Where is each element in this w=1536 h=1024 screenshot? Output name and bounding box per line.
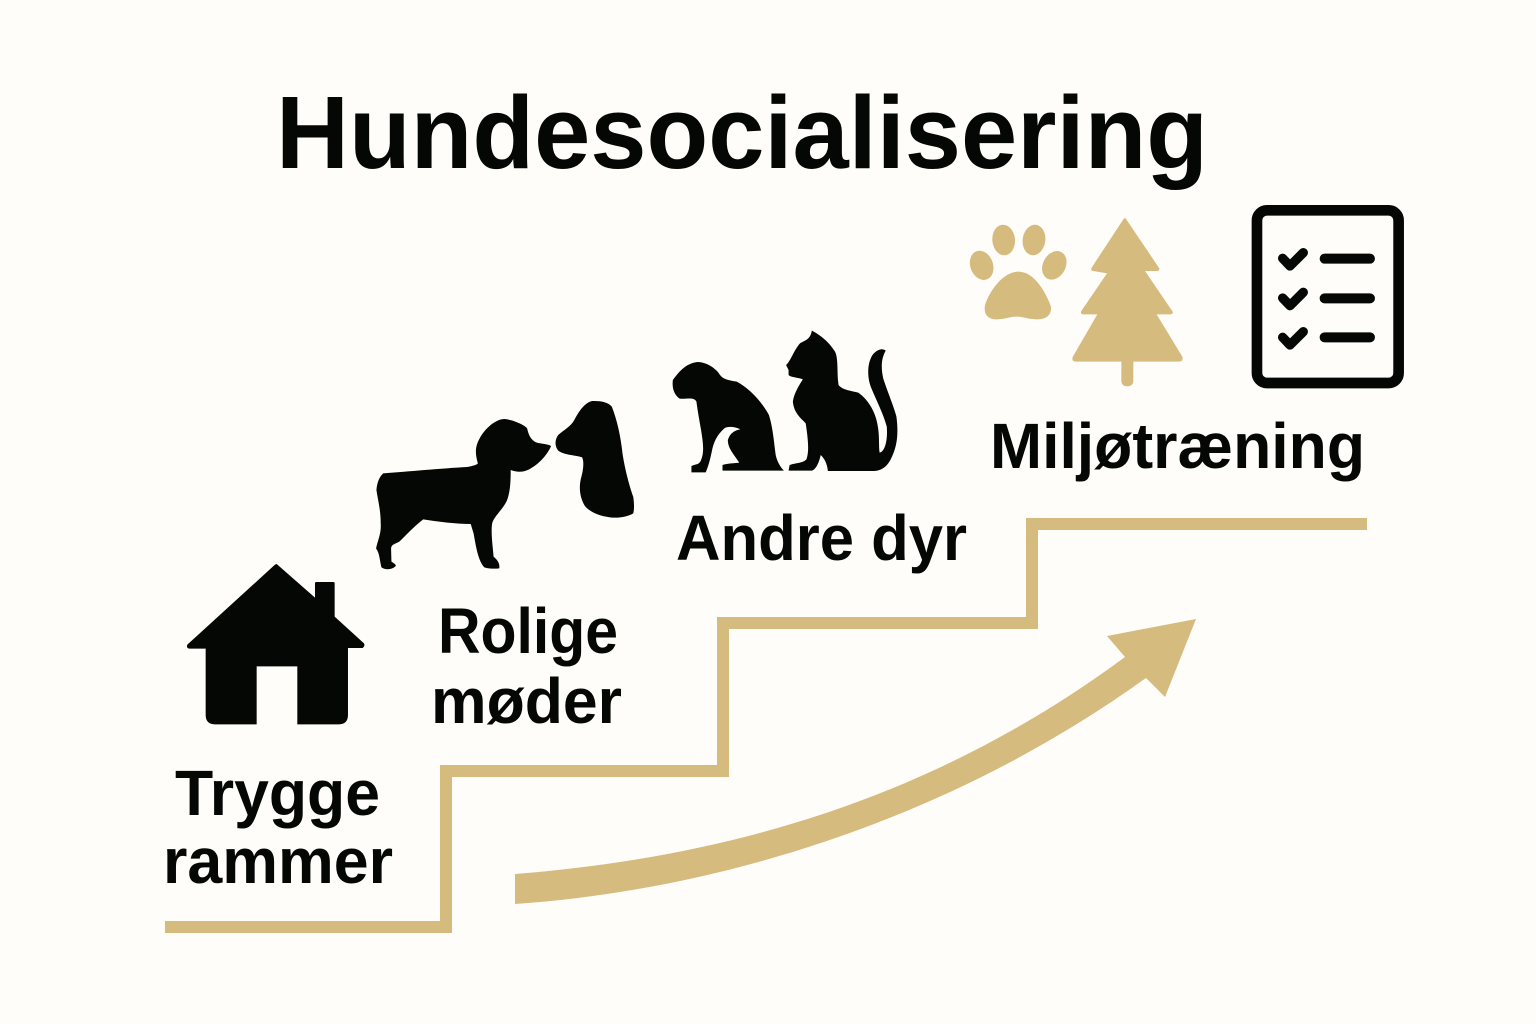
icon: house xyxy=(187,564,364,724)
label: Trygge rammer xyxy=(163,757,393,897)
rising arrow xyxy=(515,619,1196,904)
label: Trygge rammer: Trygge xyxy=(175,757,380,829)
staircase line xyxy=(165,524,1367,927)
label: Rolige møder: Rolige xyxy=(438,595,618,667)
label: Rolige møder xyxy=(431,595,622,737)
label: Trygge rammer: rammer xyxy=(163,825,393,897)
label: Miljøtræning: Miljøtræning xyxy=(990,410,1365,482)
label: Rolige møder: møder xyxy=(431,665,622,737)
label: Andre dyr: Andre dyr xyxy=(676,502,967,574)
icon: dog and cat xyxy=(673,331,897,472)
icon: tree xyxy=(1072,218,1183,386)
icon: paw print xyxy=(966,223,1071,319)
title: Hundesocialisering xyxy=(276,75,1208,190)
icon: two dogs meeting xyxy=(376,401,634,569)
icon: checklist xyxy=(1257,210,1399,383)
